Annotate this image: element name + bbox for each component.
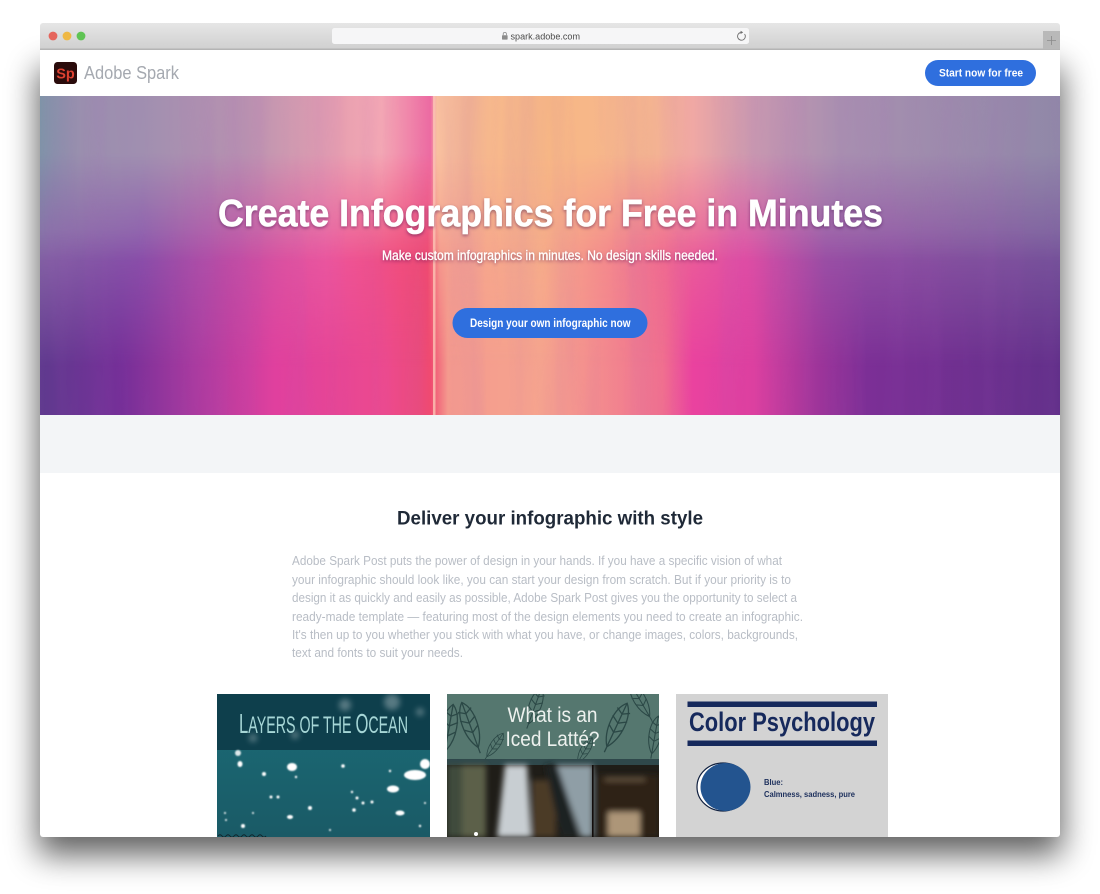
blue description: Calmness, sadness, pure — [764, 790, 855, 799]
body paragraph: Adobe Spark Post puts the power of design in your hands. If you have a specific vision of what — [292, 553, 782, 568]
url text: spark.adobe.com — [510, 32, 580, 42]
latté title: Iced Latté? — [506, 728, 600, 751]
icon: Adobe Spark logo — [54, 62, 77, 84]
window control: minimise — [63, 32, 71, 40]
button: design infographic: Design your own infographic now — [470, 318, 631, 330]
body paragraph: ready-made template — featuring most of the design elements you need to create an infographic. — [292, 609, 803, 624]
hero banner — [40, 96, 1060, 415]
section heading: Deliver your infographic with style — [397, 508, 703, 530]
new tab button — [1043, 31, 1060, 49]
icon: Adobe Spark logo: Sp — [56, 66, 75, 82]
latté header divider — [447, 759, 659, 765]
ocean title: LAYERS OF THE OCEAN — [239, 708, 408, 739]
window control: close — [49, 32, 57, 40]
brand name: Adobe Spark — [84, 63, 180, 83]
water highlights — [224, 694, 430, 831]
feather pattern — [447, 694, 659, 759]
body paragraph: text and fonts to suit your needs. — [292, 645, 463, 660]
navigation bar — [40, 50, 1060, 96]
bottom rule — [688, 740, 877, 746]
wave decoration — [218, 835, 266, 837]
blue description — [764, 778, 855, 799]
icon: reload — [738, 31, 745, 40]
latté title — [507, 706, 599, 746]
latté title: What is an — [508, 704, 598, 727]
body paragraph: your infographic should look like, you can start your design from scratch. But if your priority is to — [292, 572, 791, 587]
blue description: Blue: — [764, 778, 783, 787]
button: design infographic — [452, 308, 648, 338]
ocean header band — [217, 694, 430, 750]
hero subtitle: Make custom infographics in minutes. No design skills needed. — [382, 248, 718, 263]
top rule — [688, 702, 877, 707]
body paragraph — [292, 553, 803, 660]
window control: zoom — [77, 32, 85, 40]
browser toolbar — [40, 23, 1060, 50]
card: Layers of the Ocean — [217, 694, 430, 837]
body paragraph: design it as quickly and easily as possible, Adobe Spark Post gives you the opportunity to select a — [292, 590, 798, 605]
grey spacer band — [40, 415, 1060, 473]
button: start now — [925, 60, 1036, 86]
hero title: Create Infographics for Free in Minutes — [218, 193, 883, 235]
card: Color Psychology — [676, 694, 888, 837]
icon: lock — [502, 32, 508, 40]
colour psychology title: Color Psychology — [689, 707, 875, 737]
button: start now: Start now for free — [939, 68, 1023, 80]
card: What is an Iced Latté — [447, 694, 659, 837]
icon: blue circle — [697, 763, 750, 811]
body paragraph: It's then up to you whether you stick with what you have, or change images, colors, backgrounds, — [292, 627, 798, 642]
coffee photo — [447, 765, 659, 837]
address bar — [332, 28, 749, 44]
